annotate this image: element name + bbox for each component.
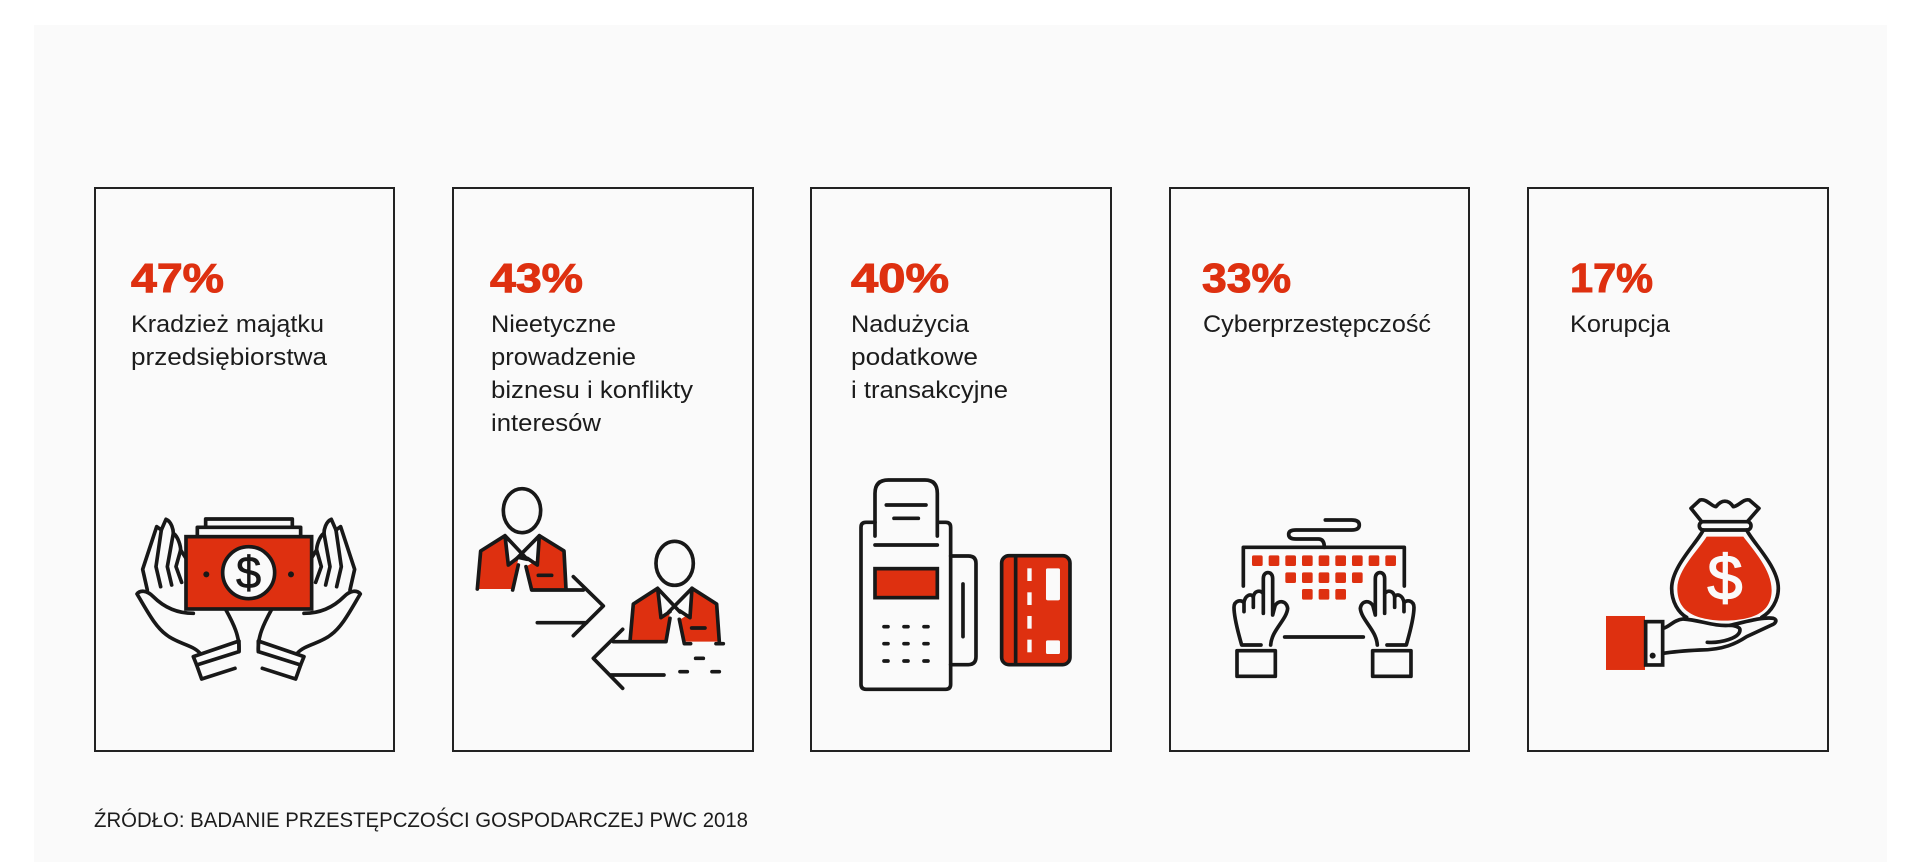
- icon: hands holding banknotes: [137, 519, 360, 679]
- label: tax abuse: podatkowe: [851, 344, 978, 371]
- icon: hands on keyboard: [1234, 520, 1414, 676]
- panel: unethical business conduct 43%: [453, 188, 753, 751]
- stat: 47%: 47%: [131, 255, 224, 301]
- icon: hands holding banknotes: $: [236, 547, 261, 598]
- panel: tax and transaction abuse 40%: [811, 188, 1111, 751]
- label: asset theft: [131, 311, 327, 371]
- source note: ŹRÓDŁO: BADANIE PRZESTĘPCZOŚCI GOSPODARCZEJ PWC 2018: [94, 808, 748, 832]
- label: unethical conduct: interesów: [491, 410, 601, 437]
- stat: 17%: 17%: [1570, 255, 1653, 301]
- stat: 43%: 43%: [490, 255, 583, 301]
- label: corruption: Korupcja: [1570, 311, 1670, 338]
- label: cybercrime: Cyberprzestępczość: [1203, 311, 1431, 338]
- panel: cybercrime 33%: [1170, 188, 1469, 751]
- label: unethical conduct: Nieetyczne: [491, 311, 616, 338]
- stat: 33%: 33%: [1202, 255, 1291, 301]
- label: tax abuse: i transakcyjne: [851, 377, 1008, 404]
- icon: two people exchanging: [477, 489, 723, 688]
- panel: asset theft 47%: [95, 188, 394, 751]
- label: tax abuse: Nadużycia: [851, 311, 969, 338]
- icon: payment terminal and card: [861, 480, 1070, 689]
- label: tax abuse: [851, 311, 1008, 404]
- panel: corruption 17%: [1528, 188, 1828, 751]
- icon: hand holding money bag: [1606, 500, 1778, 670]
- label: unethical conduct: prowadzenie: [491, 344, 636, 371]
- stat: 40%: 40%: [851, 255, 949, 301]
- label: asset theft: Kradzież majątku: [131, 311, 324, 338]
- label: unethical conduct: [491, 311, 694, 437]
- label: asset theft: przedsiębiorstwa: [131, 344, 327, 371]
- label: unethical conduct: biznesu i konflikty: [491, 377, 694, 404]
- icon: hand holding money bag: $: [1707, 543, 1743, 613]
